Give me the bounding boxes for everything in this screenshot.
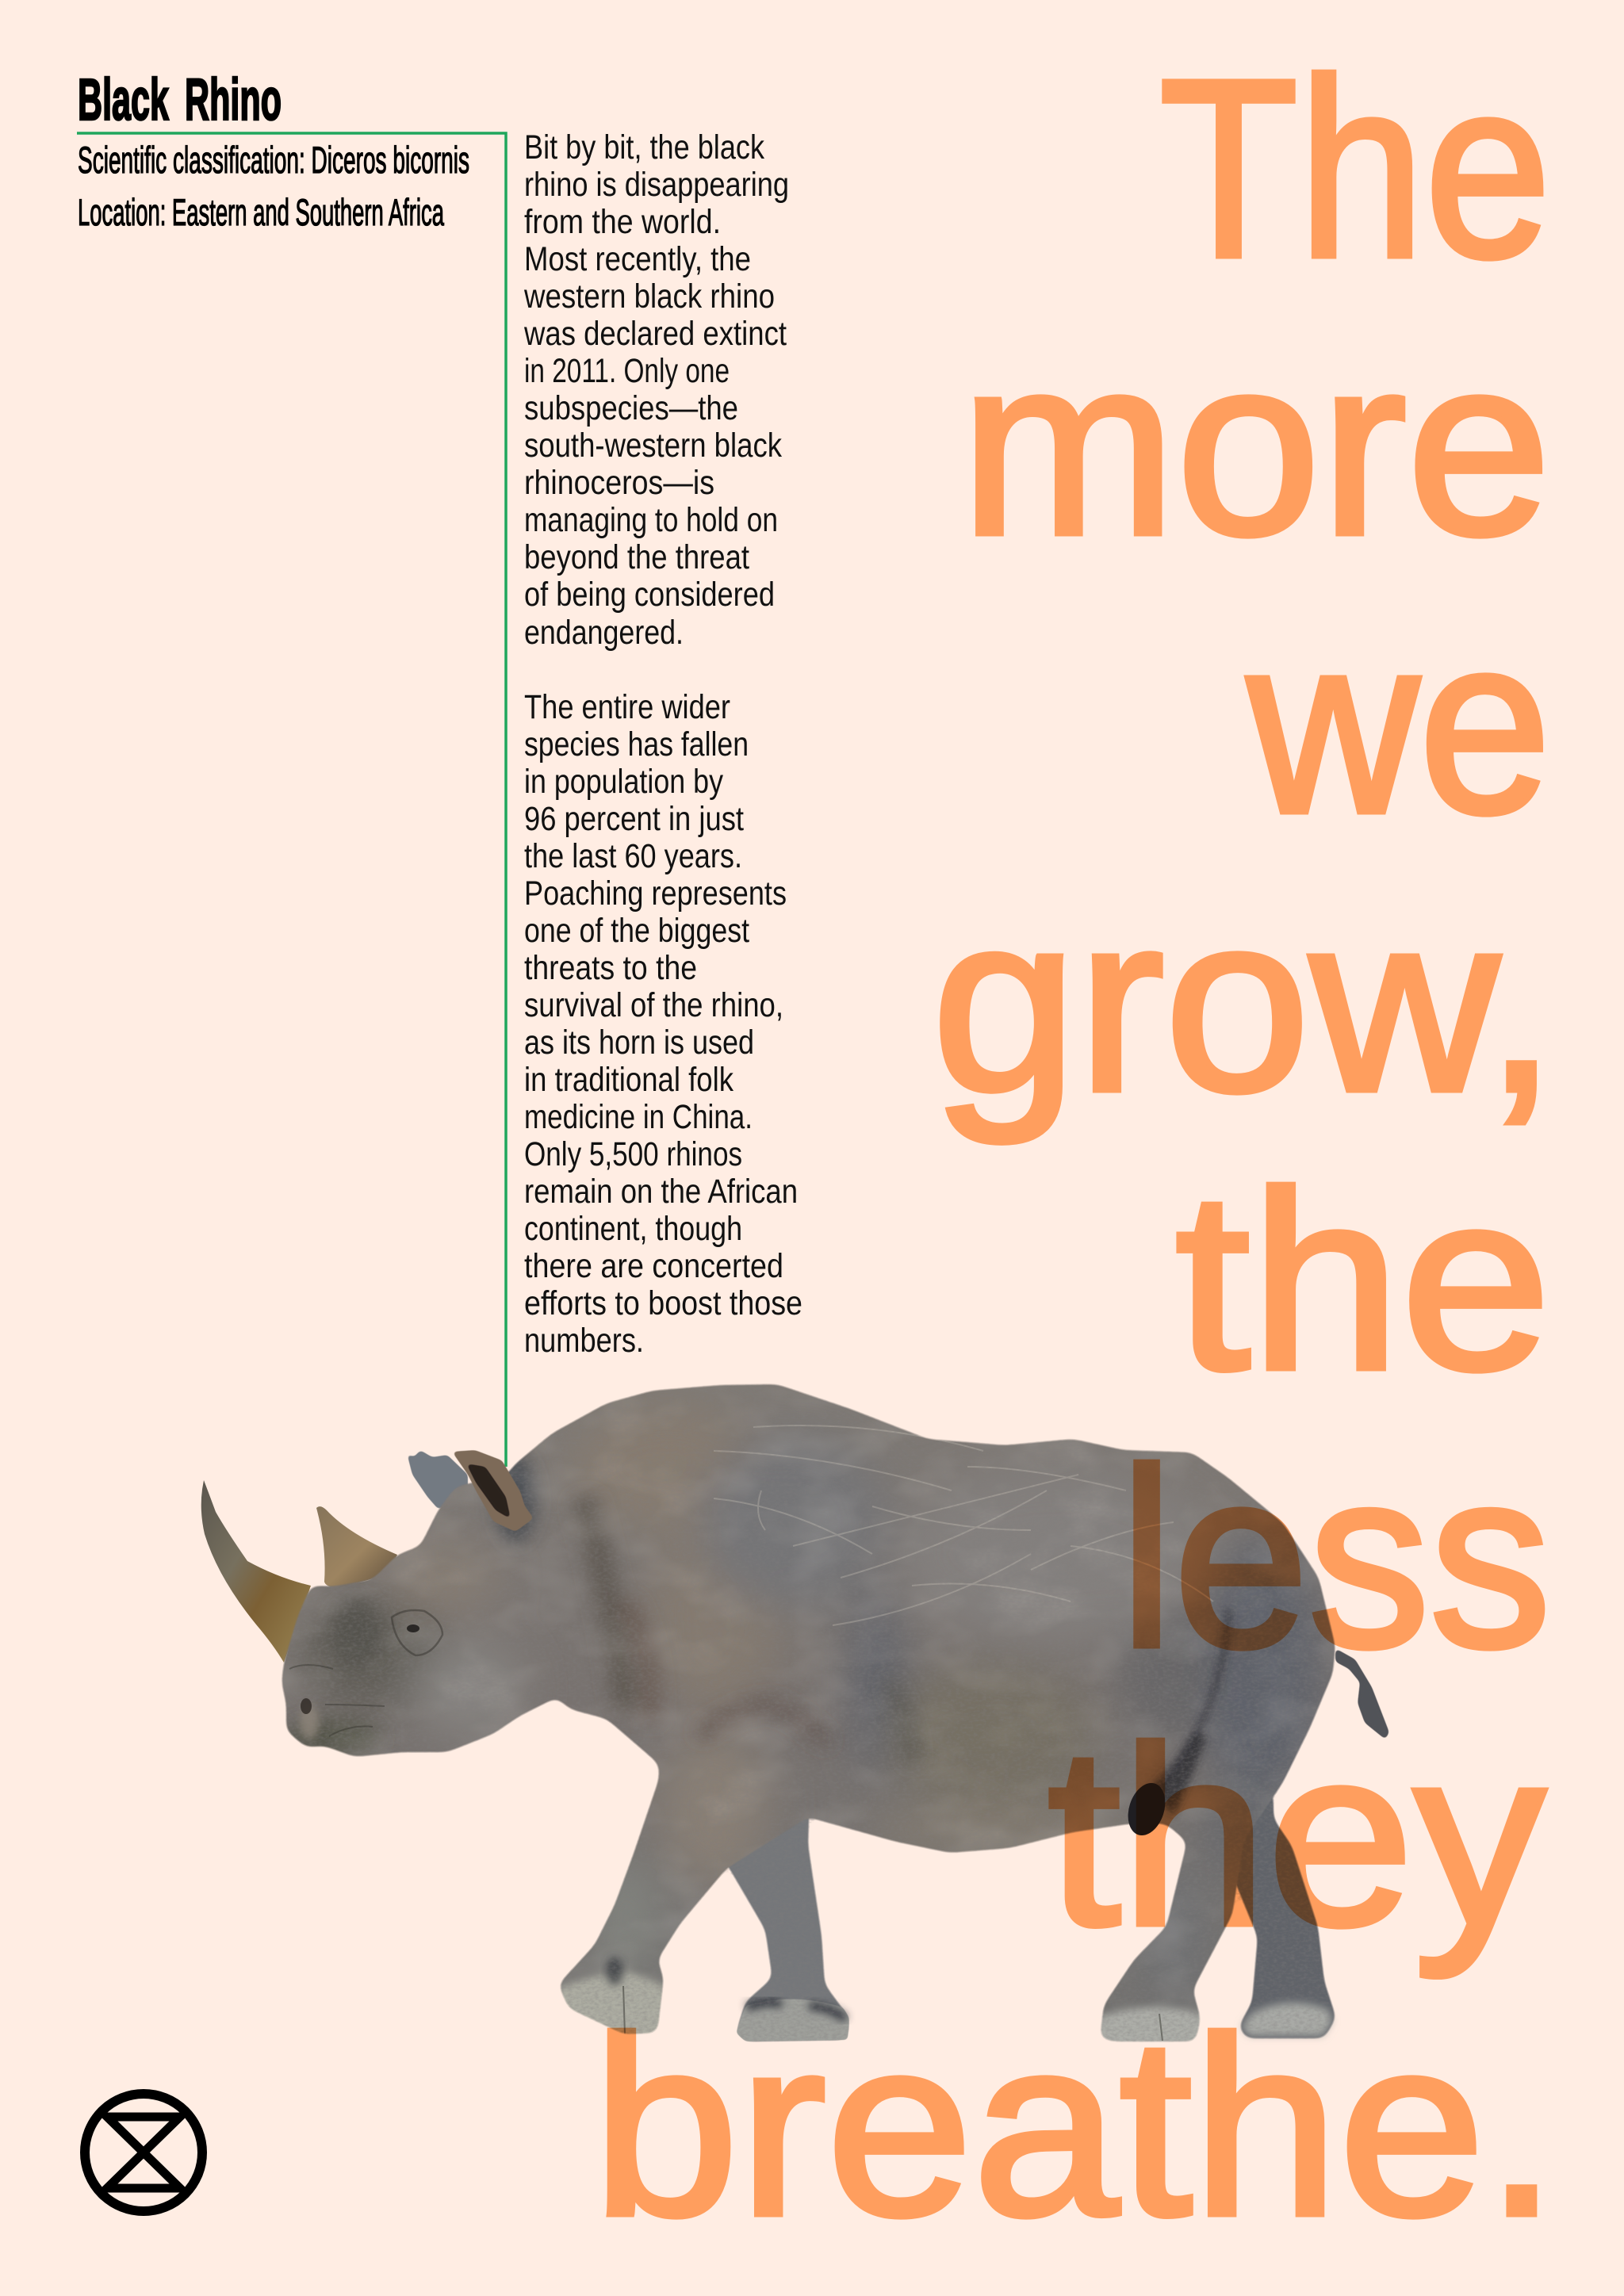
body copy: 96 percent in just	[524, 800, 744, 838]
body copy: one of the biggest	[524, 912, 749, 950]
body copy: western black rhino	[523, 277, 775, 316]
body copy: species has fallen	[524, 725, 749, 763]
headline: the	[1175, 1138, 1551, 1422]
scrotum shadow	[1122, 1778, 1171, 1840]
headline: The	[1159, 26, 1551, 310]
body copy: beyond the threat	[524, 538, 749, 576]
body copy: subspecies—the	[524, 389, 738, 427]
body copy: numbers.	[524, 1322, 644, 1360]
body copy: rhino is disappearing	[524, 166, 789, 204]
far hind leg	[1221, 1784, 1336, 2038]
body copy: in traditional folk	[524, 1061, 733, 1099]
body copy: survival of the rhino,	[524, 986, 783, 1024]
mouth wrinkles	[289, 1665, 385, 1736]
rear ear	[407, 1450, 468, 1510]
rhino illustration	[201, 1372, 1389, 2053]
body copy: remain on the African	[524, 1173, 798, 1211]
far hind hoof	[1242, 2003, 1332, 2036]
eye	[392, 1610, 442, 1655]
nostril	[300, 1698, 319, 1739]
body copy: the last 60 years.	[524, 837, 742, 875]
location: Location: Eastern and Southern Africa	[78, 191, 444, 233]
green leader line	[77, 133, 506, 1467]
near front hoof	[561, 1954, 663, 2034]
headline: we	[1243, 582, 1551, 866]
title: Black Rhino	[78, 67, 282, 132]
headline	[592, 26, 1558, 2268]
body copy: endangered.	[524, 614, 684, 652]
body copy: rhinoceros—is	[524, 464, 714, 502]
body copy: Only 5,500 rhinos	[524, 1135, 742, 1173]
rear horn	[316, 1506, 397, 1588]
body and head	[270, 1372, 1348, 2053]
front ear	[452, 1450, 534, 1532]
near hind hoof	[1101, 2003, 1201, 2042]
body copy: threats to the	[524, 949, 697, 987]
headline: grow,	[932, 860, 1557, 1146]
body copy: Bit by bit, the black	[524, 128, 764, 166]
body copy: Poaching represents	[524, 874, 787, 913]
body copy: in 2011. Only one	[524, 352, 730, 390]
hip crease	[1146, 1609, 1228, 1816]
body copy: from the world.	[524, 203, 721, 241]
front horn	[201, 1480, 311, 1663]
headline: less	[1120, 1416, 1551, 1700]
body copy: was declared extinct	[523, 315, 787, 353]
body copy: continent, though	[524, 1210, 742, 1248]
headline: they	[1048, 1694, 1545, 1980]
logo: extinction symbol	[85, 2094, 202, 2211]
body copy: efforts to boost those	[524, 1284, 802, 1322]
far front hoof	[736, 1999, 849, 2042]
body copy: in population by	[524, 763, 723, 801]
classification: Scientific classification: Diceros bicornis	[78, 139, 469, 181]
body copy: there are concerted	[524, 1247, 783, 1285]
headline: breathe.	[592, 1984, 1558, 2268]
far front leg	[698, 1784, 849, 2042]
body copy: Most recently, the	[524, 240, 751, 278]
scratches	[714, 1425, 1213, 1625]
body copy: medicine in China.	[524, 1098, 753, 1136]
body copy: of being considered	[524, 576, 775, 614]
tail	[1335, 1648, 1389, 1739]
body copy	[523, 128, 802, 1360]
ear interior	[466, 1464, 511, 1519]
headline: more	[960, 304, 1551, 587]
leg and hide texture	[270, 1372, 1348, 2053]
body copy: managing to hold on	[524, 501, 778, 539]
hide mottling	[282, 1413, 1334, 1983]
body copy: as its horn is used	[524, 1024, 754, 1062]
body copy: The entire wider	[524, 688, 730, 726]
body copy: south-western black	[524, 427, 782, 465]
